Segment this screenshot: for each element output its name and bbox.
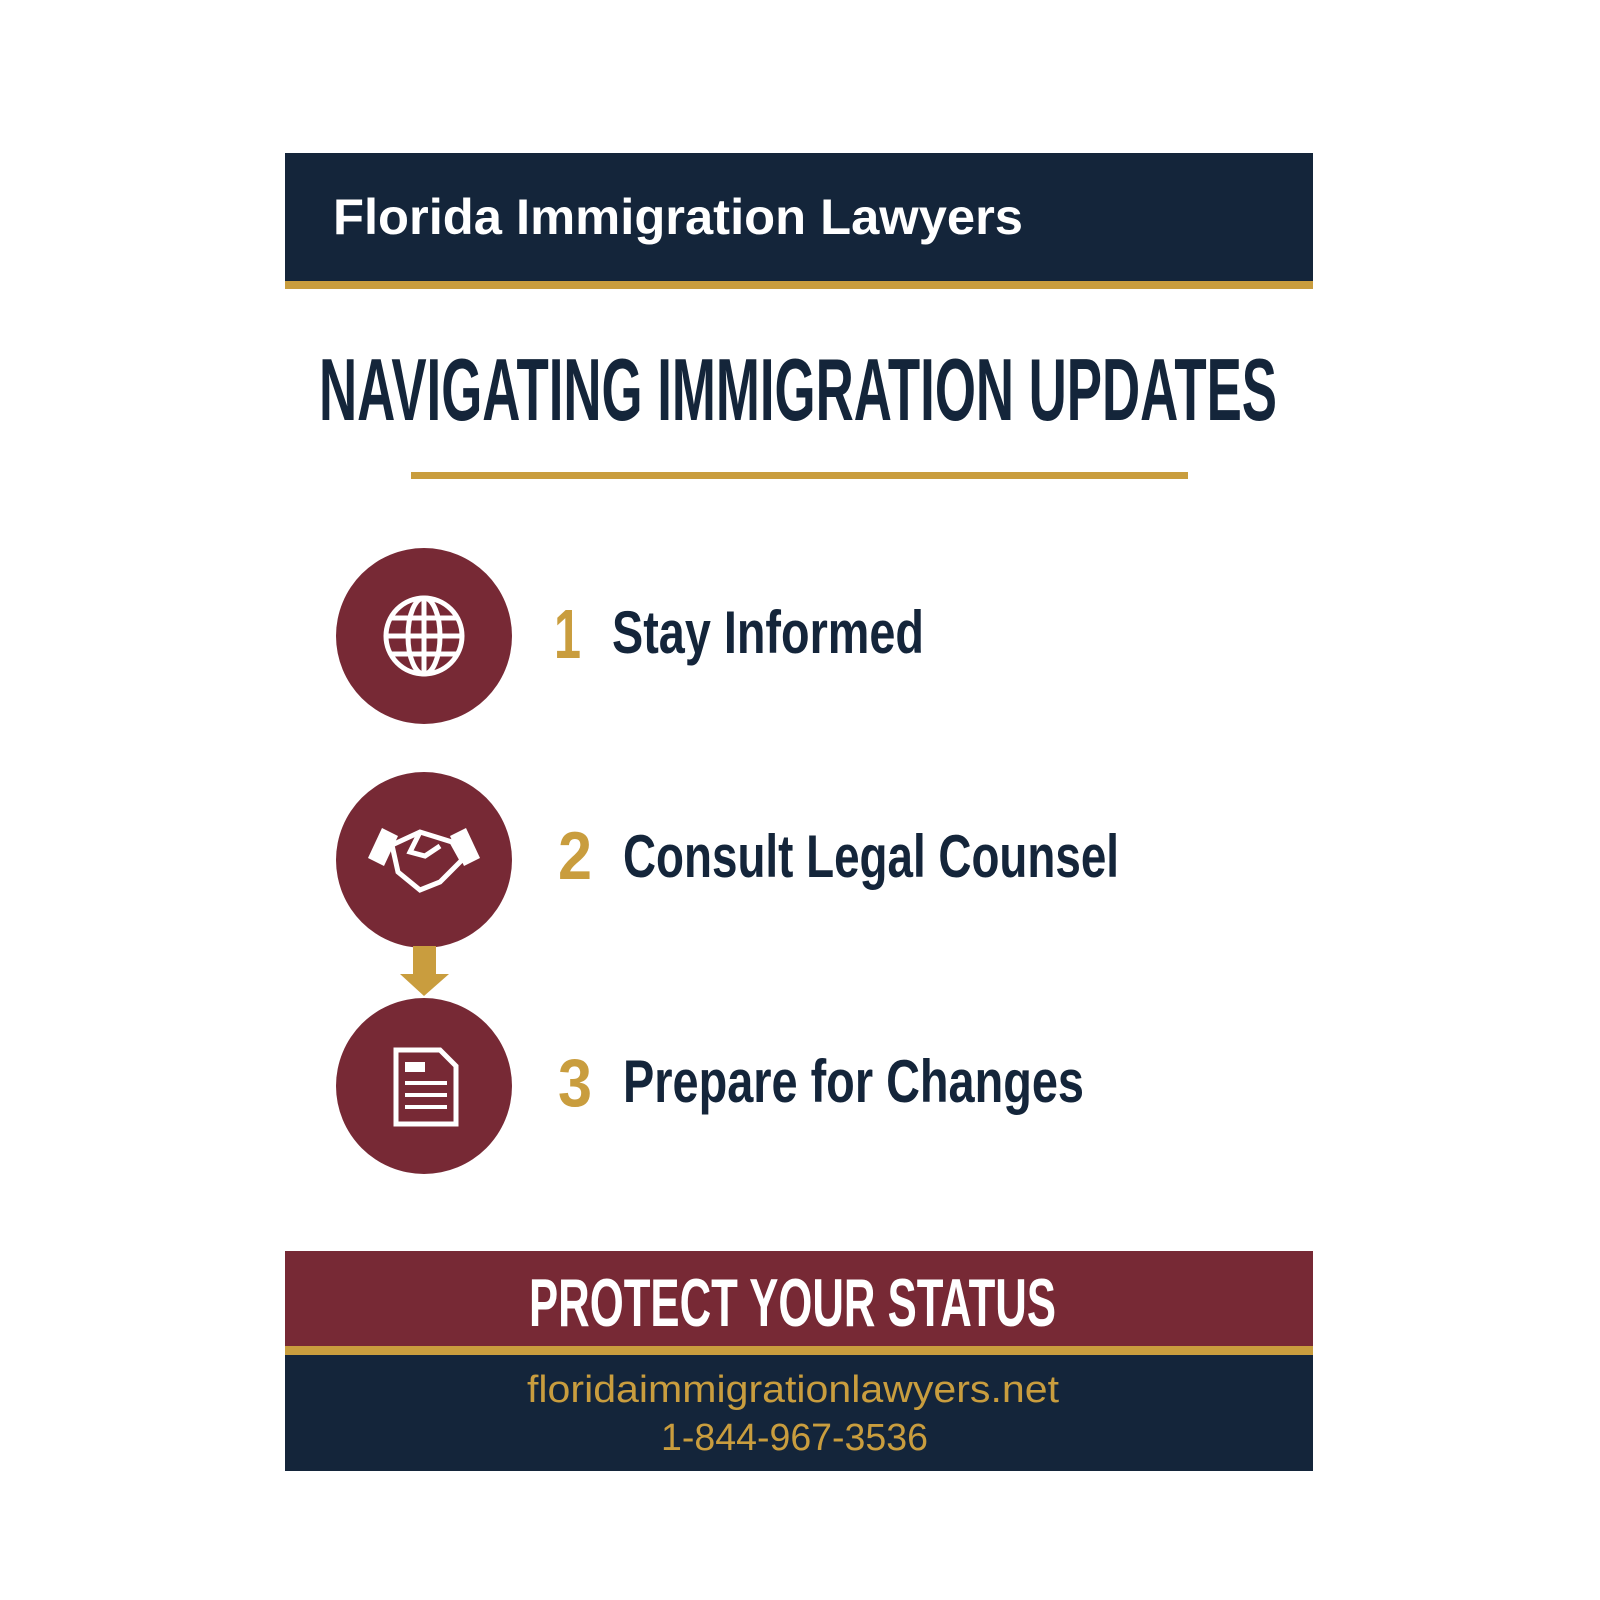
- step 1 number: 1: [554, 595, 581, 673]
- icon: document: [336, 998, 512, 1174]
- header banner: [285, 153, 1313, 289]
- icon: handshake: [336, 772, 512, 948]
- step 3 label: Prepare for Changes: [623, 1048, 1084, 1115]
- footer heading: PROTECT YOUR STATUS: [529, 1265, 1056, 1341]
- footer banner: [285, 1251, 1313, 1471]
- step 3 number: 3: [558, 1045, 592, 1121]
- step 1: [336, 548, 924, 724]
- title underline: [411, 472, 1188, 479]
- website: floridaimmigrationlawyers.net: [527, 1369, 1059, 1411]
- step 2: [336, 772, 1119, 948]
- step 2 label: Consult Legal Counsel: [623, 823, 1119, 890]
- step 1 label: Stay Informed: [612, 599, 924, 666]
- step 3: [336, 998, 1084, 1174]
- phone: 1-844-967-3536: [661, 1417, 928, 1459]
- arrow: down: [400, 946, 449, 996]
- header text: Florida Immigration Lawyers: [333, 189, 1023, 245]
- icon: globe: [336, 548, 512, 724]
- step 2 number: 2: [558, 818, 592, 894]
